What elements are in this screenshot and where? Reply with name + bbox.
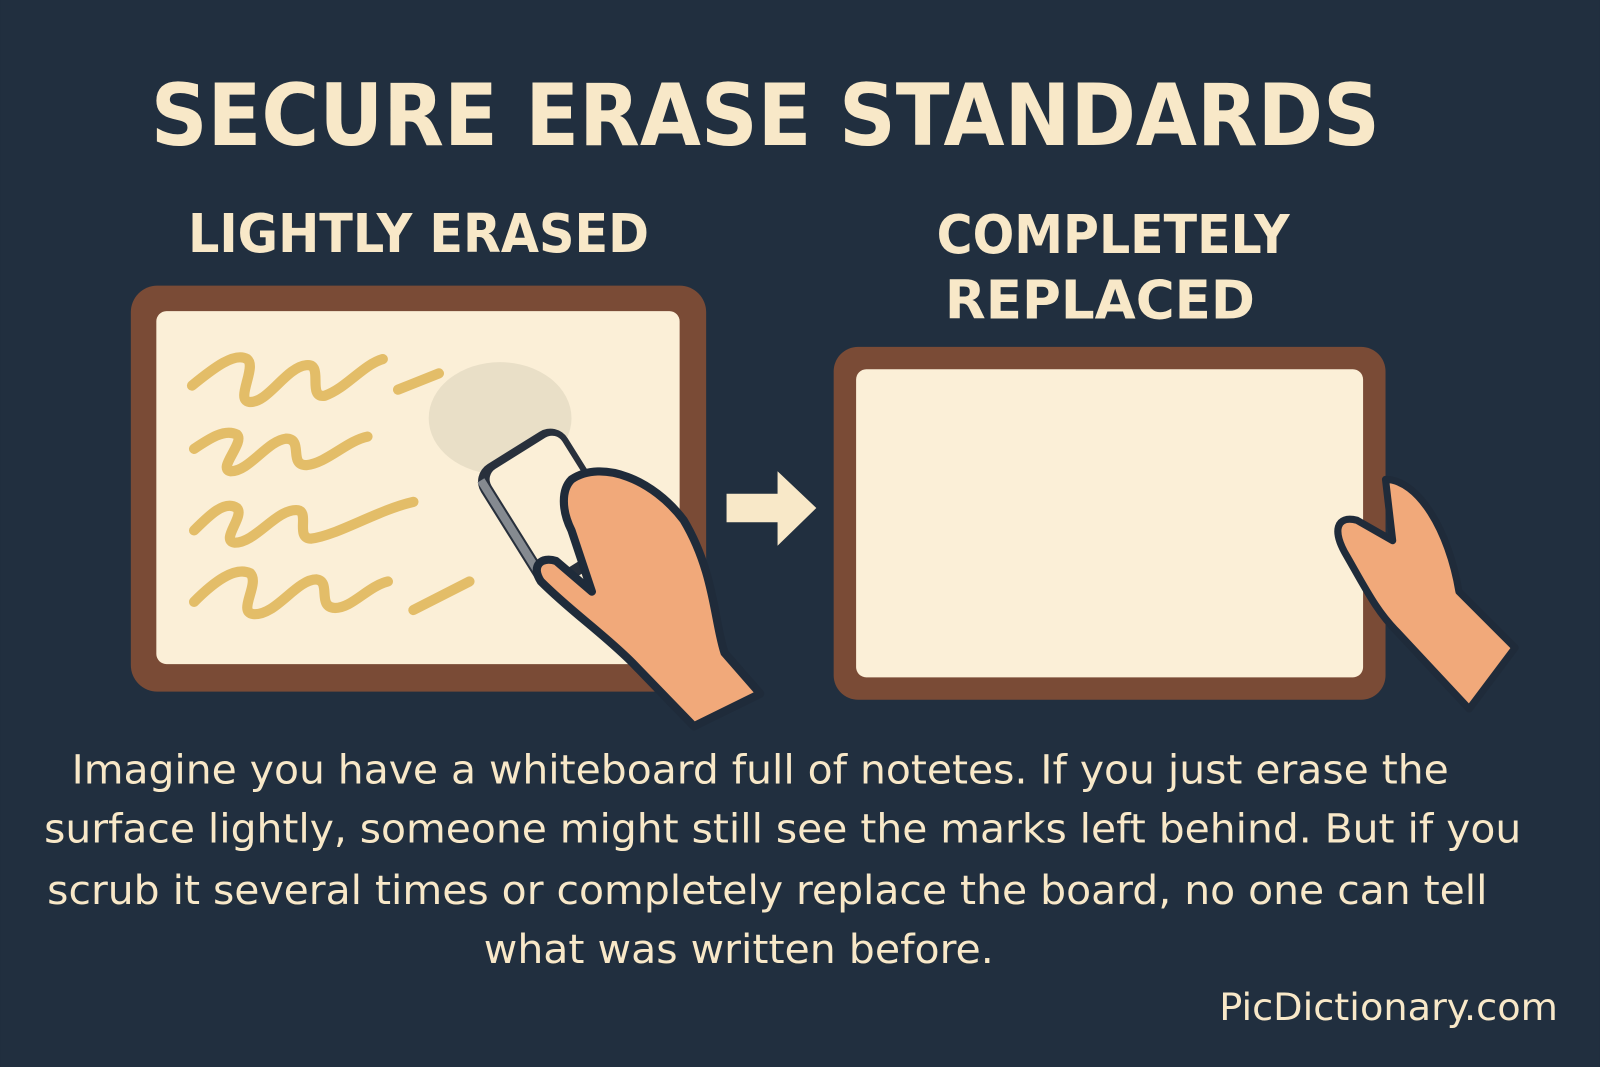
panel: completely replaced whiteboard bbox=[834, 347, 1515, 709]
heading: completely replaced bbox=[937, 204, 1290, 331]
title: SECURE ERASE STANDARDS bbox=[151, 66, 1380, 166]
paragraph: Imagine you have a whiteboard full of notetes. If you just erase the bbox=[72, 747, 1449, 793]
paragraph: scrub it several times or completely replace the board, no one can tell bbox=[47, 868, 1488, 914]
footer: source: PicDictionary.com bbox=[1219, 985, 1558, 1029]
hand holding board bbox=[1338, 479, 1515, 709]
heading: completely replaced: REPLACED bbox=[945, 269, 1255, 331]
heading: lightly erased: LIGHTLY ERASED bbox=[188, 203, 649, 265]
panel: lightly erased whiteboard bbox=[131, 286, 760, 726]
heading: completely replaced: COMPLETELY bbox=[937, 204, 1290, 266]
eraser bbox=[470, 421, 632, 596]
paragraph bbox=[44, 747, 1521, 973]
paragraph: what was written before. bbox=[484, 927, 994, 973]
smudge bbox=[429, 362, 572, 474]
scribbles bbox=[192, 357, 469, 614]
hand bbox=[537, 471, 760, 726]
arrow bbox=[727, 471, 816, 546]
paragraph: surface lightly, someone might still see the marks left behind. But if you bbox=[44, 807, 1521, 853]
